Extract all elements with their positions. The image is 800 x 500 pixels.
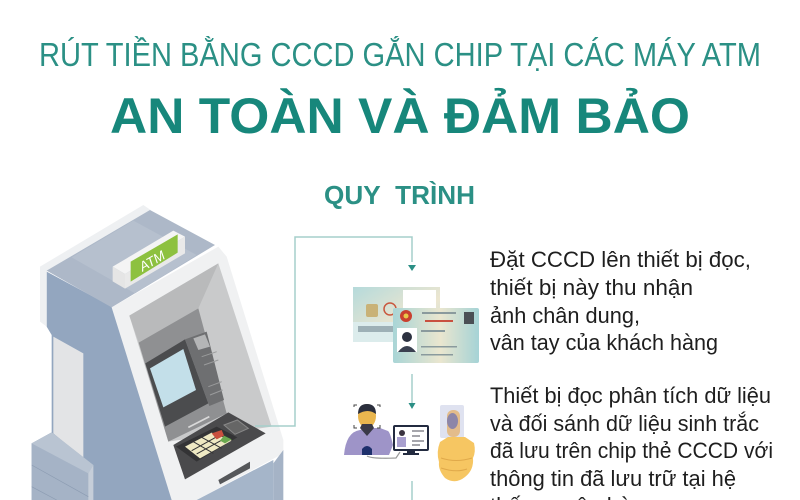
ATM keypad [173,412,266,479]
text block: step 1 [490,247,751,355]
title: second line: AN TOÀN VÀ ĐẢM BẢO [110,88,690,144]
icon: chip ID cards [353,287,479,363]
text block: step 1: ảnh chân dung, [490,303,640,328]
text block: step 2: và đối sánh dữ liệu sinh trắc [490,411,759,436]
ATM screen [145,332,224,427]
illustration: ATM machine [32,205,283,500]
arrow: card to biometric [408,374,416,409]
text block: step 2: đã lưu trên chip thẻ CCCD với [490,438,773,463]
arrow: to card [408,265,416,271]
ATM sign [113,231,185,289]
text block: step 2 [490,383,773,500]
text block: step 1: vân tay của khách hàng [490,330,718,355]
heading: process: QUY TRÌNH [324,180,475,210]
text block: step 1: thiết bị này thu nhận [490,275,693,300]
connector: ATM to card reader [255,237,412,426]
text block: step 2: Thiết bị đọc phân tích dữ liệu [490,383,771,408]
text block: step 2: thông tin đã lưu trữ tại hệ [490,466,736,491]
ATM sign: ATM [136,247,168,275]
icon: fingerprint scan [438,405,475,481]
text block: step 1: Đặt CCCD lên thiết bị đọc, [490,247,751,272]
icon: monitor [394,426,428,455]
arrow: biometric next step [411,481,413,500]
icon: face scan person [344,404,400,458]
